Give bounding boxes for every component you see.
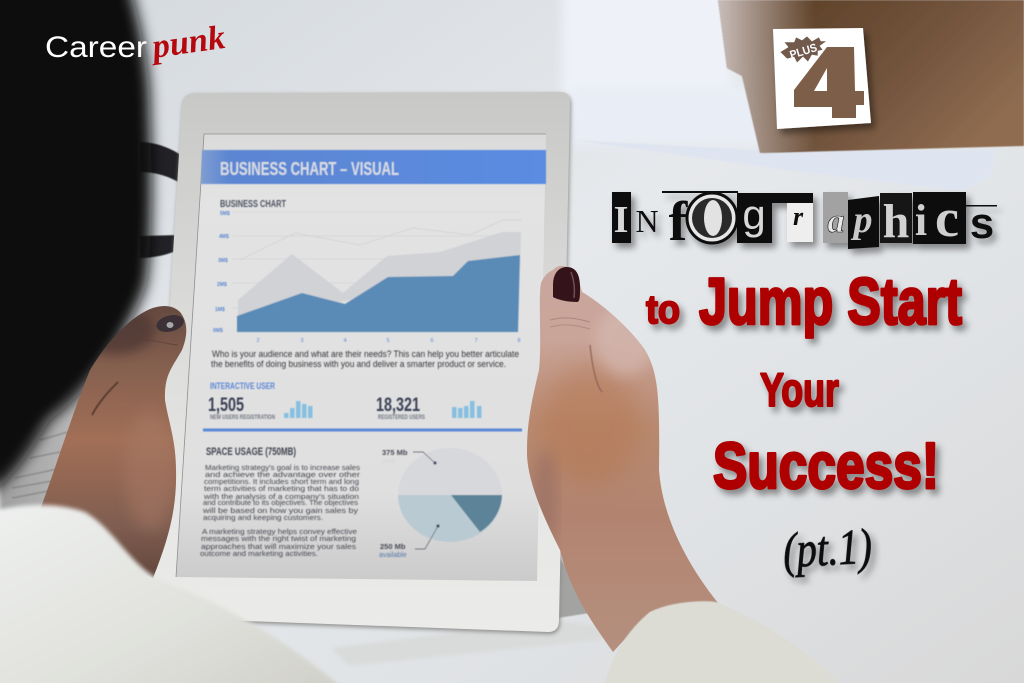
heading: Infographics ransom letters: f <box>669 191 689 253</box>
photo: dark hair <box>0 0 152 500</box>
area chart <box>213 199 522 344</box>
area chart: 0M$ <box>213 328 223 334</box>
tablet <box>152 92 571 634</box>
photo: papers under tablet <box>330 555 610 666</box>
area chart: 8 <box>517 338 521 344</box>
intro paragraph: the benefits of doing business with you and deliver a smarter product or service. <box>211 359 506 370</box>
area chart: 5M$ <box>220 211 230 217</box>
space usage text: approaches that will maximize your sales <box>201 542 356 551</box>
area chart: 6 <box>430 338 434 344</box>
area chart: 4M$ <box>219 234 229 240</box>
right hand and wrist <box>520 260 725 655</box>
interactive user stats: REGISTERED USERS <box>378 414 425 421</box>
white sleeve: right <box>603 601 845 683</box>
heading: Infographics ransom letters: c <box>935 188 959 248</box>
area chart: 2 <box>256 338 260 344</box>
area chart: BUSINESS CHART <box>220 199 286 210</box>
area chart: 4 <box>343 338 347 344</box>
heading: Infographics ransom letters: r <box>793 202 804 231</box>
logo: Careerpunk: Career <box>45 31 147 64</box>
heading: Infographics ransom letters: I <box>614 199 628 241</box>
heading: Infographics ransom letters: N <box>635 203 659 239</box>
area chart: 3M$ <box>218 258 228 264</box>
nail: right thumb <box>553 267 580 302</box>
heading: Infographics ransom letters: a <box>828 203 844 240</box>
area chart: 5 <box>386 338 390 344</box>
photo: mug handle <box>140 142 185 258</box>
space usage text <box>200 446 361 558</box>
heading: Your: Your <box>760 363 839 416</box>
space usage text: with the analysis of a company's situation <box>203 492 359 501</box>
screen header bar <box>201 150 546 184</box>
space usage text: Marketing strategy's goal is to increase sales <box>205 463 360 472</box>
heading: Infographics ransom letters: h <box>883 195 909 248</box>
interactive user stats: 1,505 <box>208 395 244 416</box>
interactive user stats: INTERACTIVE USER <box>210 381 275 391</box>
nail: left thumb <box>155 312 186 335</box>
space usage text: and achieve the advantage over other <box>205 470 361 479</box>
logo: Careerpunk: punk <box>147 19 227 66</box>
area chart: 1M$ <box>215 307 225 313</box>
space usage text: SPACE USAGE (750MB) <box>206 446 296 458</box>
heading: to Jump Start: to <box>646 288 680 332</box>
badge: plus 4 <box>773 28 871 129</box>
area chart: 2M$ <box>217 282 227 288</box>
heading: Infographics ransom letters: s <box>970 199 994 248</box>
space usage text: will be based on how you gain sales by <box>202 506 358 515</box>
photo: brown folder <box>718 0 1024 153</box>
pie chart: 375 Mb <box>382 448 408 457</box>
area chart: 3 <box>300 338 304 344</box>
intro paragraph <box>211 349 519 370</box>
heading: to Jump Start <box>646 264 962 338</box>
space usage text: acquiring and keeping customers. <box>203 513 323 522</box>
intro paragraph: Who is your audience and what are their needs? This can help you better articulate <box>212 349 519 360</box>
interactive user stats <box>203 381 522 432</box>
pie chart: available <box>379 552 407 559</box>
heading: Success!: Success! <box>713 429 939 502</box>
space usage text: A marketing strategy helps convey effective <box>202 527 357 536</box>
pie chart <box>379 448 502 559</box>
heading: Infographics ransom letters: g <box>742 191 766 238</box>
white sleeve: left <box>0 505 345 683</box>
space usage text: term activities of marketing that has to do <box>204 484 359 493</box>
logo: Careerpunk <box>45 19 227 66</box>
space usage text: outcome and marketing activities. <box>200 549 318 558</box>
interactive user stats: NEW USERS REGISTRATION <box>210 414 275 421</box>
burst: PLUS: PLUS <box>788 42 819 62</box>
heading: Infographics ransom letters <box>612 188 997 253</box>
area chart: 7 <box>474 338 478 344</box>
space usage text: competitions. It includes short term and long <box>204 477 359 486</box>
heading: part 1: (pt.1) <box>781 518 873 578</box>
pie chart: used <box>382 459 395 465</box>
numeral 4 cut-out <box>794 47 864 118</box>
interactive user stats: 18,321 <box>376 395 420 416</box>
left hand <box>41 306 186 578</box>
screen header bar: BUSINESS CHART – VISUAL <box>220 159 399 179</box>
tablet screen <box>176 134 546 581</box>
space usage text: and contribute to its objectives. The objectives <box>203 498 358 507</box>
heading: Infographics ransom letters: i <box>915 196 927 245</box>
pie chart: 250 Mb <box>380 542 406 551</box>
heading: Infographics ransom letters: p <box>850 199 872 241</box>
space usage text: messages with the right twist of marketing <box>201 534 356 543</box>
photo: printed paper at far left <box>0 330 120 512</box>
